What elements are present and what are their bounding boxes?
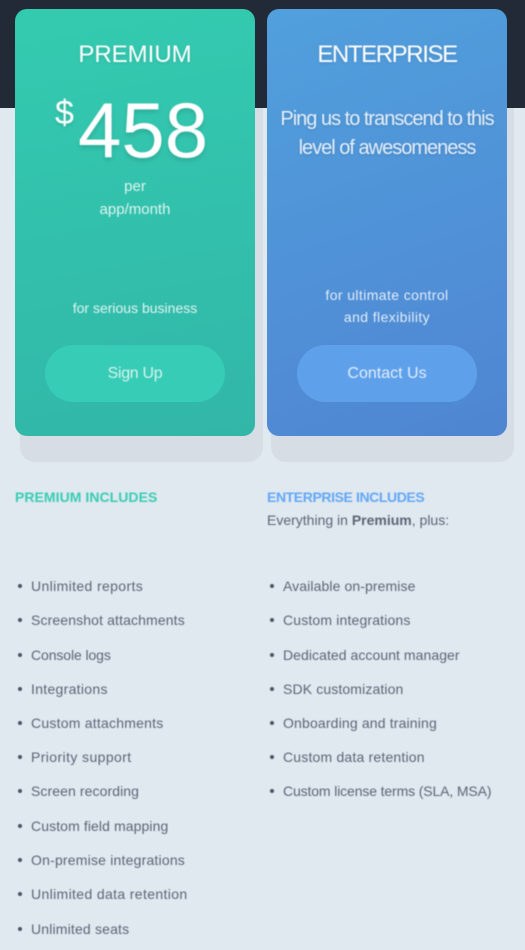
enterprise feature list: [269, 578, 492, 800]
premium feature list: On-premise integrations: [31, 852, 185, 868]
enterprise tagline: [325, 287, 449, 326]
enterprise heading: ENTERPRISE: [317, 41, 457, 68]
premium feature list: Integrations: [31, 681, 108, 697]
premium feature list: Unlimited reports: [31, 578, 143, 594]
premium feature list: Custom attachments: [31, 715, 164, 731]
premium feature list: Custom field mapping: [31, 818, 168, 834]
price period: per: [124, 178, 146, 195]
enterprise feature list: Onboarding and training: [283, 715, 437, 731]
price period: [100, 178, 170, 218]
enterprise includes heading: ENTERPRISE INCLUDES: [267, 489, 424, 505]
price period: app/month: [100, 201, 170, 218]
enterprise feature list: Available on-premise: [283, 578, 415, 594]
premium heading: PREMIUM: [78, 41, 192, 68]
premium feature list: Unlimited data retention: [31, 886, 188, 902]
panel: enterprise card: [267, 9, 507, 436]
card shadow: premium: [20, 108, 263, 462]
premium feature list: Screenshot attachments: [31, 612, 185, 628]
sign up label: Sign Up: [108, 365, 162, 382]
enterprise feature list: Custom integrations: [283, 612, 411, 628]
enterprise description: [280, 108, 494, 159]
dark header band: [0, 0, 525, 108]
enterprise description: Ping us to transcend to this: [280, 108, 494, 130]
enterprise feature list: SDK customization: [283, 681, 403, 697]
card shadow: enterprise: [271, 108, 514, 462]
premium includes heading: PREMIUM INCLUDES: [15, 489, 157, 505]
enterprise description: level of awesomeness: [299, 137, 475, 159]
premium feature list: Unlimited seats: [31, 921, 129, 937]
enterprise tagline: and flexibility: [344, 309, 430, 325]
premium tagline: for serious business: [73, 300, 197, 316]
contact us label: Contact Us: [347, 365, 427, 382]
enterprise feature list: Custom data retention: [283, 749, 425, 765]
button: sign up: [45, 345, 225, 402]
panel: premium card: [15, 9, 255, 436]
premium feature list: [17, 578, 188, 937]
enterprise feature list: Custom license terms (SLA, MSA): [283, 783, 491, 799]
premium feature list: Priority support: [31, 749, 132, 765]
premium feature list: Console logs: [31, 647, 111, 663]
enterprise includes intro: Everything in Premium, plus:: [267, 512, 449, 528]
premium feature list: Screen recording: [31, 783, 139, 799]
price: 458: [78, 86, 208, 174]
enterprise tagline: for ultimate control: [325, 287, 449, 303]
enterprise feature list: Dedicated account manager: [283, 647, 460, 663]
button: contact us: [297, 345, 477, 402]
currency symbol: $: [55, 94, 74, 132]
